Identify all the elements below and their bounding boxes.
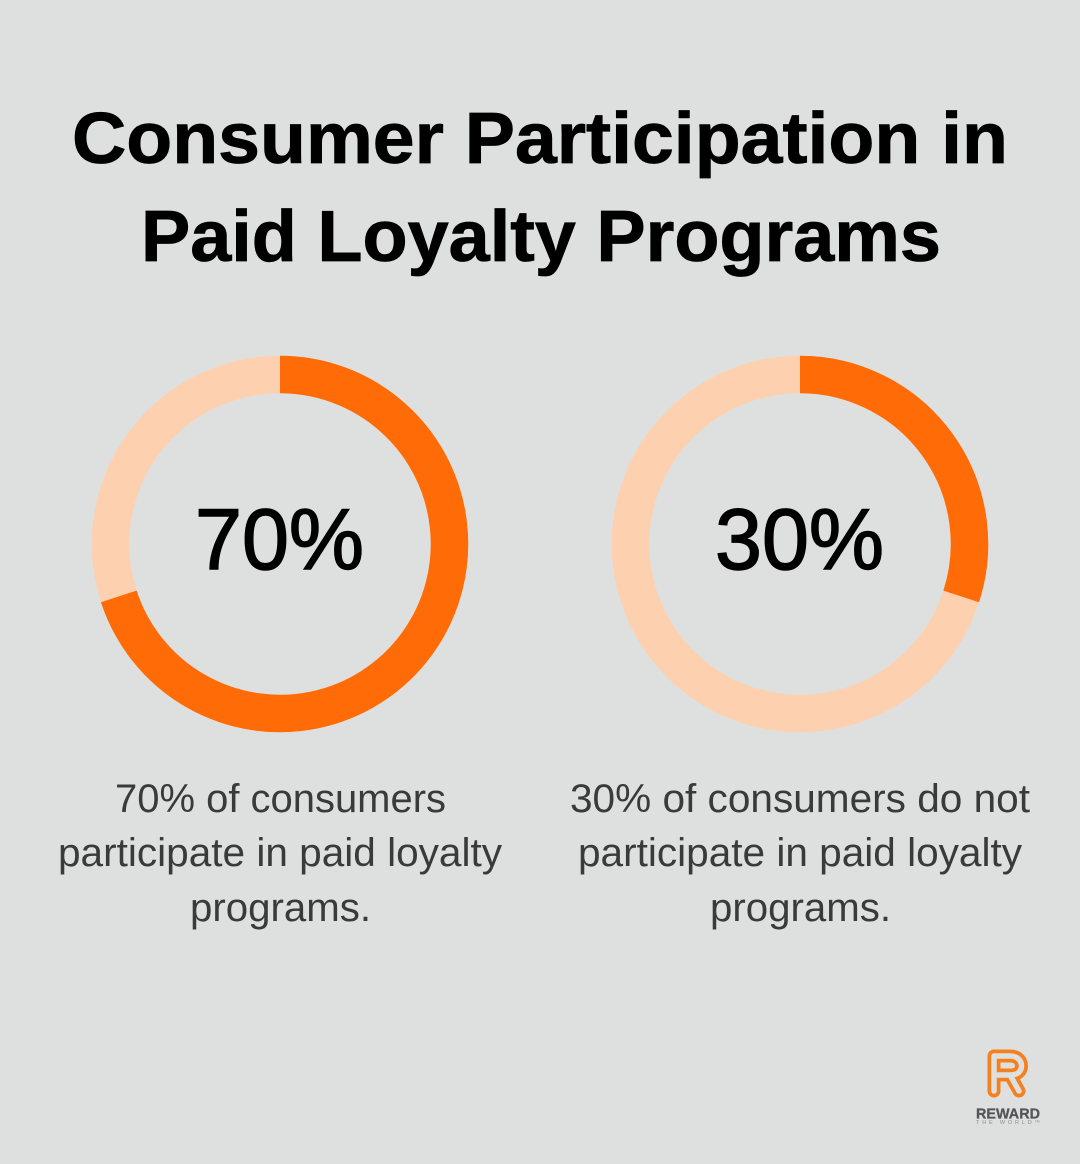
description: 70%: participate in paid loyalty bbox=[58, 831, 502, 875]
donut chart: 30% bbox=[630, 374, 970, 714]
panel: 30 percent do not participate bbox=[570, 374, 1030, 930]
description: 30%: programs. bbox=[710, 886, 891, 930]
description: 70%: 70% of consumers bbox=[115, 777, 446, 821]
title: Consumer Participation in bbox=[72, 99, 1008, 179]
title bbox=[72, 99, 1008, 277]
wordmark: REWARD bbox=[976, 1106, 1040, 1122]
tagline: THE WORLD™ bbox=[976, 1120, 1040, 1126]
icon: R mark bbox=[994, 1056, 1022, 1091]
donut chart: 70% bbox=[110, 374, 450, 714]
description: 30%: participate in paid loyalty bbox=[578, 831, 1022, 875]
description: 70%: programs. bbox=[190, 886, 371, 930]
description: 70% bbox=[58, 777, 502, 930]
title: Paid Loyalty Programs bbox=[141, 197, 941, 277]
stat: 70%: 70% bbox=[195, 492, 364, 588]
description: 30% bbox=[570, 777, 1030, 930]
description: 30%: 30% of consumers do not bbox=[570, 777, 1030, 821]
logo: Reward the World bbox=[976, 1056, 1040, 1126]
panel: 70 percent participate bbox=[58, 374, 502, 930]
stat: 30%: 30% bbox=[715, 492, 884, 588]
